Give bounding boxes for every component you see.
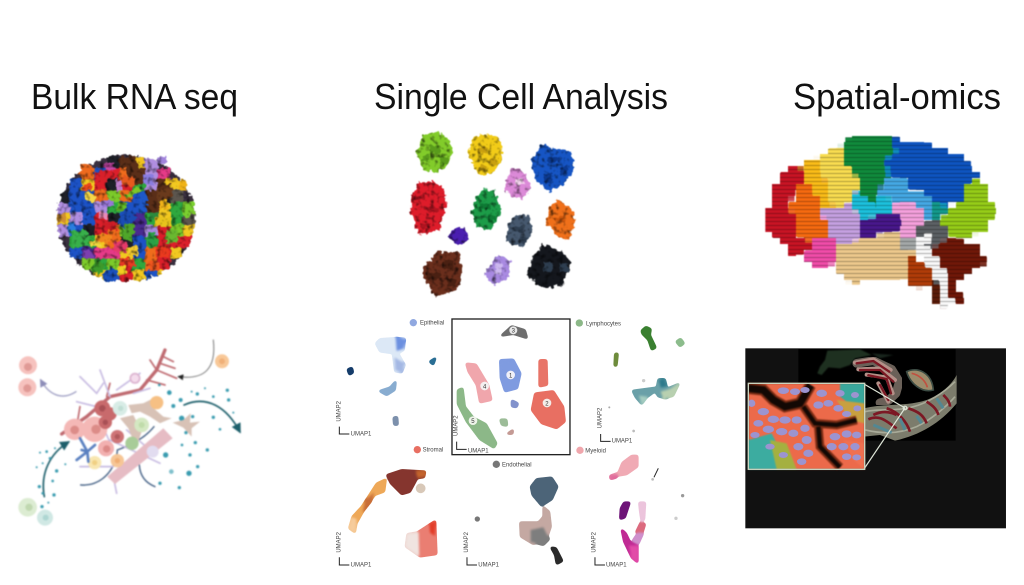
panel: epithelial UMAP: Epithelial — [420, 321, 444, 327]
title: Single Cell Analysis: Single Cell Analysis — [374, 76, 668, 117]
cluster: indigo — [449, 227, 469, 246]
panel: overview UMAP frame: 5 — [471, 419, 475, 425]
large tissue strip — [864, 375, 957, 441]
panel: lymphocytes UMAP: UMAP2 — [598, 407, 604, 428]
callout: zoom lines — [864, 384, 907, 469]
panel: overview UMAP frame — [452, 319, 570, 455]
cluster: pink — [504, 168, 532, 199]
panel: overview UMAP frame: 2 — [545, 401, 549, 407]
blood vessel — [62, 350, 177, 434]
icon: mixed pile of lego bricks — [57, 155, 196, 283]
muscle band — [107, 428, 173, 484]
panel: stromal UMAP — [336, 446, 443, 569]
cluster: lavender — [484, 255, 511, 285]
diagram: tumour microenvironment cells — [18, 340, 240, 526]
panel: overview UMAP frame: 3 — [512, 329, 516, 335]
blue dendritic cell — [77, 438, 95, 462]
tissue oval — [907, 370, 933, 391]
colon tissue upper strip — [855, 359, 899, 403]
panel: lymphocytes UMAP — [576, 319, 684, 445]
panel: epithelial UMAP — [336, 319, 444, 438]
title: Bulk RNA seq: Bulk RNA seq — [31, 76, 238, 117]
central tumour cells — [64, 396, 163, 469]
cluster: blue — [531, 144, 575, 191]
panel: myeloid UMAP: UMAP1 — [606, 563, 627, 569]
fibroblasts — [120, 397, 200, 442]
panel: lymphocytes UMAP: Lymphocytes — [586, 321, 621, 327]
icon: lego brain — [768, 135, 993, 308]
orange cell — [215, 354, 229, 368]
panel: stromal UMAP: Stromal — [423, 448, 443, 454]
chart: UMAP atlas — [336, 319, 684, 569]
panel: overview UMAP frame: 4 — [483, 384, 487, 390]
cluster: green — [472, 189, 501, 231]
teal molecules right — [158, 384, 234, 489]
icon: lego bricks sorted by colour — [411, 132, 575, 295]
panel: lymphocytes UMAP: UMAP1 — [612, 439, 633, 445]
panel: overview UMAP frame: 1 — [509, 373, 513, 379]
panel: stromal UMAP: UMAP2 — [336, 531, 342, 553]
panel: endothelial UMAP — [464, 461, 563, 569]
panel: epithelial UMAP: UMAP2 — [336, 400, 342, 422]
panel: spatial-omics microscopy image — [745, 348, 1006, 528]
cluster: slate — [506, 215, 533, 247]
panel: overview UMAP frame: UMAP2 — [454, 415, 460, 436]
cluster: red — [411, 181, 446, 235]
panel: overview UMAP frame: UMAP1 — [468, 449, 489, 455]
teal molecules left — [36, 447, 66, 508]
infographic canvas — [18, 83, 1006, 566]
panel: myeloid UMAP: Myeloid — [585, 449, 606, 455]
inset: cell close-up — [748, 383, 865, 469]
migrating pink cells — [18, 356, 37, 396]
panel: endothelial UMAP: UMAP2 — [464, 531, 470, 553]
cluster: orange — [546, 199, 575, 241]
fibres — [77, 370, 160, 493]
cluster: brown — [422, 252, 462, 295]
panel: endothelial UMAP: UMAP1 — [478, 563, 500, 569]
dim green tissue — [817, 349, 893, 375]
panel: stromal UMAP: UMAP1 — [351, 563, 372, 569]
panel: myeloid UMAP: UMAP2 — [592, 531, 598, 553]
panel: epithelial UMAP: UMAP1 — [351, 432, 372, 438]
panel: endothelial UMAP: Endothelial — [502, 463, 532, 469]
cluster: lime — [416, 132, 453, 173]
curved arrows — [41, 340, 240, 497]
title: Spatial-omics: Spatial-omics — [793, 76, 1001, 117]
green and teal cells — [18, 498, 53, 526]
cluster: black — [528, 244, 571, 288]
panel: myeloid UMAP — [576, 447, 684, 569]
cluster: yellow — [467, 134, 503, 174]
